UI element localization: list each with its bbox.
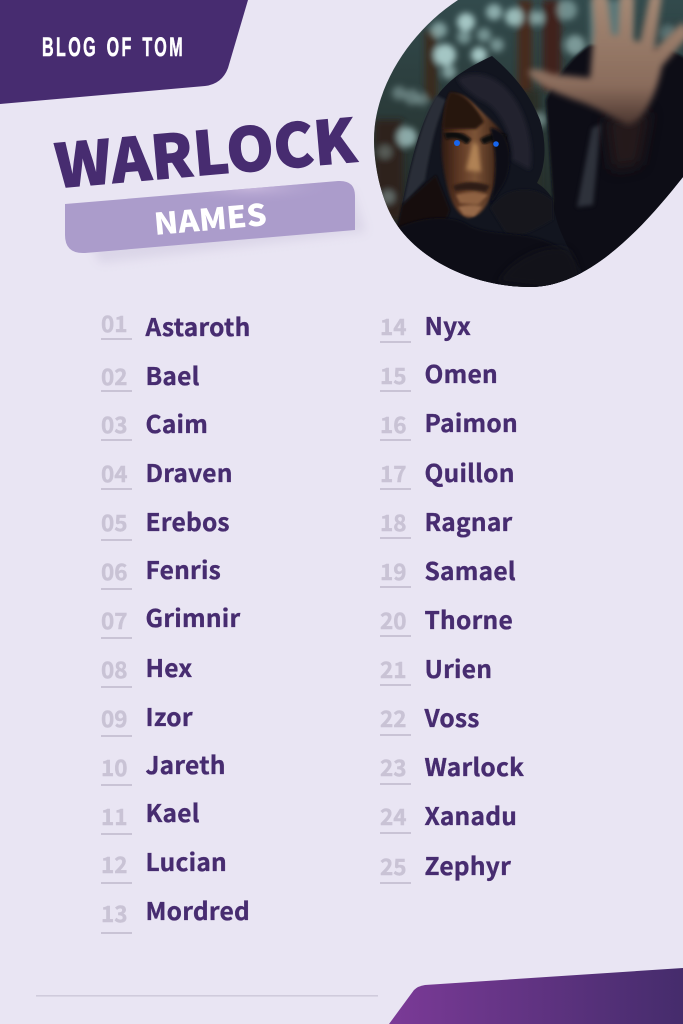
name 09: 09 [101,702,128,734]
name 03: 03 [101,408,128,440]
name 05: Erebos [146,504,230,539]
name 10: 10 [101,750,128,782]
name 07: Grimnir [146,600,240,635]
name 08 [101,650,192,688]
name 14 [380,308,471,343]
name 21: Urien [424,651,492,686]
name 25: Zephyr [424,848,511,883]
name 23: Warlock [424,749,524,784]
name 04: 04 [101,456,128,488]
name 02: Bael [146,358,200,393]
name 18: Ragnar [424,504,512,539]
name 06 [101,552,221,590]
name 17: 17 [380,456,407,488]
name 10: Jareth [146,747,226,782]
name 15: Omen [424,356,498,391]
name 22 [380,700,480,736]
name 13 [101,893,250,934]
name 14: Nyx [424,308,471,343]
name 08: Hex [146,650,192,685]
name 05 [101,504,230,541]
header banner [0,0,248,104]
name 16: Paimon [424,405,518,440]
name 24 [380,798,517,834]
forest trunks and bokeh [375,0,683,220]
name 25 [380,848,511,884]
name 01 [101,306,250,344]
name 01: Astaroth [146,309,250,344]
name 21: 21 [380,652,407,684]
name 09: Izor [146,699,193,734]
cloak folds [490,190,553,235]
name 19: 19 [380,554,407,586]
name 18 [380,504,512,539]
name 19: Samael [424,553,516,588]
name 21 [380,651,492,686]
name 13: Mordred [146,893,250,928]
name 24: Xanadu [424,798,517,833]
name 19 [380,553,516,588]
name 02: 02 [101,360,128,392]
name 03 [101,406,208,441]
name 16 [380,405,518,441]
name 20: 20 [380,604,407,636]
name 12: 12 [101,848,128,880]
name 04 [101,455,233,490]
name 20: Thorne [424,602,513,637]
name 17: Quillon [424,455,515,490]
name 22: 22 [380,702,407,734]
name 11 [101,795,200,835]
name 01: 01 [101,306,128,338]
name 25: 25 [380,850,407,882]
name 22: Voss [424,700,480,735]
face [441,92,510,218]
name 23 [380,749,524,785]
name 06: 06 [101,554,128,586]
name 07 [101,600,240,639]
subtitle banner: NAMES [65,181,366,263]
name 06: Fenris [146,552,221,587]
name 08: 08 [101,652,128,684]
name 05: 05 [101,506,128,538]
name 13: 13 [101,896,128,928]
footer rule [36,995,378,997]
name 23: 23 [380,750,407,782]
raised arm cloak [545,45,683,290]
name 12 [101,844,227,884]
hood [398,56,583,287]
name 12: Lucian [146,844,227,879]
name 03: Caim [146,406,208,441]
glowing eyes [454,140,499,147]
name 14: 14 [380,310,407,342]
subtitle banner: NAMES: NAMES [152,190,268,244]
photo: hooded warlock in forest [370,0,683,295]
name 04: Draven [146,455,233,490]
name 20 [380,602,513,637]
name 02 [101,358,200,393]
name 17 [380,455,515,490]
name 11: 11 [101,800,128,832]
footer banner [389,968,683,1024]
name 10 [101,747,226,786]
name 15: 15 [380,358,407,390]
name 07: 07 [101,604,128,636]
name 11: Kael [146,795,200,830]
name 09 [101,699,193,737]
name 15 [380,356,498,392]
blog name: BLOG OF TOM [42,32,185,62]
name 18: 18 [380,506,407,538]
name 16: 16 [380,408,407,440]
hand [528,0,683,125]
title: WARLOCK: WARLOCK [51,93,361,206]
name 24: 24 [380,800,407,832]
